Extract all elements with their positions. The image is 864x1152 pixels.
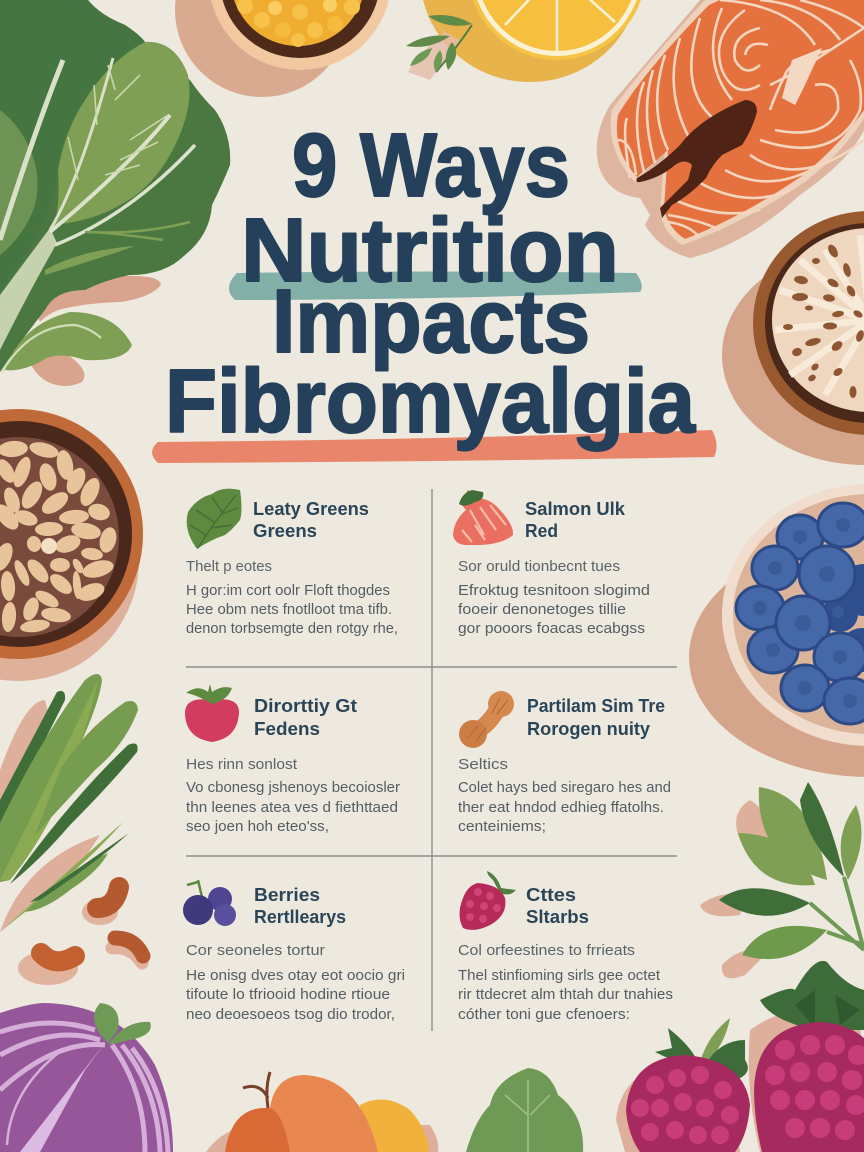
panel: nuts: ther eat hndod edhieg ffatolhs. (458, 800, 664, 816)
title: Fibromyalgia (165, 352, 696, 452)
icon: cashew nuts (18, 887, 143, 985)
icon: herb sprig (406, 15, 472, 80)
panel: berries: Berries (254, 885, 320, 905)
panel: salmon: Red (525, 521, 558, 541)
panel: salmon: gor pooors foacas ecabgss (458, 621, 645, 637)
title underline: teal (229, 272, 642, 300)
panel: apple: seo joen hoh eteo'ss, (186, 819, 329, 835)
icon: lemon slice top (420, 0, 646, 82)
icon: salmon piece (453, 490, 513, 545)
panel: leafy greens: Thelt p eotes (186, 559, 272, 575)
icon: peanut (459, 691, 514, 748)
panel: citrus: Col orfeestines to frrieats (458, 943, 635, 959)
title (165, 116, 696, 452)
panel: nuts: Partilam Sim Tre (527, 696, 665, 716)
panel: nuts (458, 691, 671, 835)
panel: citrus: cóther toni gue cfenoers: (458, 1007, 630, 1023)
icon: green beans lower left (0, 674, 138, 932)
panel: nuts: centeiniems; (458, 819, 546, 835)
panel: nuts: Colet hays bed siregaro hes and (458, 780, 671, 796)
panel: nuts: Rorogen nuity (527, 719, 650, 739)
panel: apple: Hes rinn sonlost (186, 757, 297, 773)
panel: apple: Vo cbonesg jshenoys becoiosler (186, 780, 400, 796)
panel: salmon: Salmon Ulk (525, 499, 626, 519)
panel: citrus: Sltarbs (526, 907, 589, 927)
panel: citrus: Thel stinfioming sirls gee octet (458, 968, 660, 984)
panel: salmon: fooeir denonetoges tillie (458, 602, 626, 618)
icon: leaf (187, 489, 242, 549)
icon: leafy branch lower right (700, 782, 864, 978)
panel: salmon: Efroktug tesnitoon slogimd (458, 583, 650, 599)
panel: apple (185, 684, 400, 835)
icon: purple cabbage (0, 1003, 173, 1152)
icon: raspberries lower right (616, 961, 864, 1152)
title: Impacts (272, 272, 590, 372)
panel: leafy greens: denon torbsemgte den rotgy rhe, (186, 621, 398, 637)
icon: blueberry bowl right (689, 484, 864, 777)
panel: apple: Dirorttiy Gt (254, 696, 357, 716)
panel: apple: thn leenes atea ves d fiethttaed (186, 800, 398, 816)
icon: almond bowl left (0, 409, 143, 681)
panel: leafy greens: H gor:im cort oolr Floft thogdes (186, 583, 390, 599)
panel: leafy greens (186, 489, 398, 637)
panel: leafy greens: Hee obm nets fnotlloot tma tifb. (186, 602, 392, 618)
panel: leafy greens: Greens (253, 521, 317, 541)
panel: berries: neo deoesoeos tsog dio trodor, (186, 1007, 395, 1023)
title underline: coral (152, 430, 717, 463)
icon: bowl of corn top (175, 0, 391, 97)
icon: large leafy greens top left (0, 0, 230, 386)
icon: blueberries (183, 880, 236, 926)
panel: berries (183, 880, 405, 1023)
panel: leafy greens: Leaty Greens (253, 499, 369, 519)
panel: berries: He onisg dves otay eot oocio gri (186, 968, 405, 984)
panel: citrus (458, 871, 673, 1023)
panel: citrus: rir ttdecret alm thtah dur tnahies (458, 987, 673, 1003)
panel: citrus: Cttes (526, 885, 576, 905)
title: 9 Ways (292, 116, 570, 216)
panel: berries: tifoute lo tfriooid hodine rtioue (186, 987, 390, 1003)
icon: salmon steak top right (597, 0, 864, 258)
panel: nuts: Seltics (458, 757, 508, 773)
icon: apple (185, 684, 239, 742)
icon: peach and yellow fruit bottom (206, 1072, 438, 1152)
icon: oat bowl right (722, 211, 864, 465)
icon: leaf bottom center (466, 1068, 583, 1152)
title: Nutrition (241, 201, 619, 301)
panel: berries: Rertllearys (254, 907, 346, 927)
panel: salmon (453, 490, 650, 637)
icon: raspberry (460, 871, 516, 930)
grid dividers (186, 489, 677, 1031)
panel: apple: Fedens (254, 719, 320, 739)
panel: berries: Cor seoneles tortur (186, 943, 325, 959)
panel: salmon: Sor oruld tionbecnt tues (458, 559, 620, 575)
